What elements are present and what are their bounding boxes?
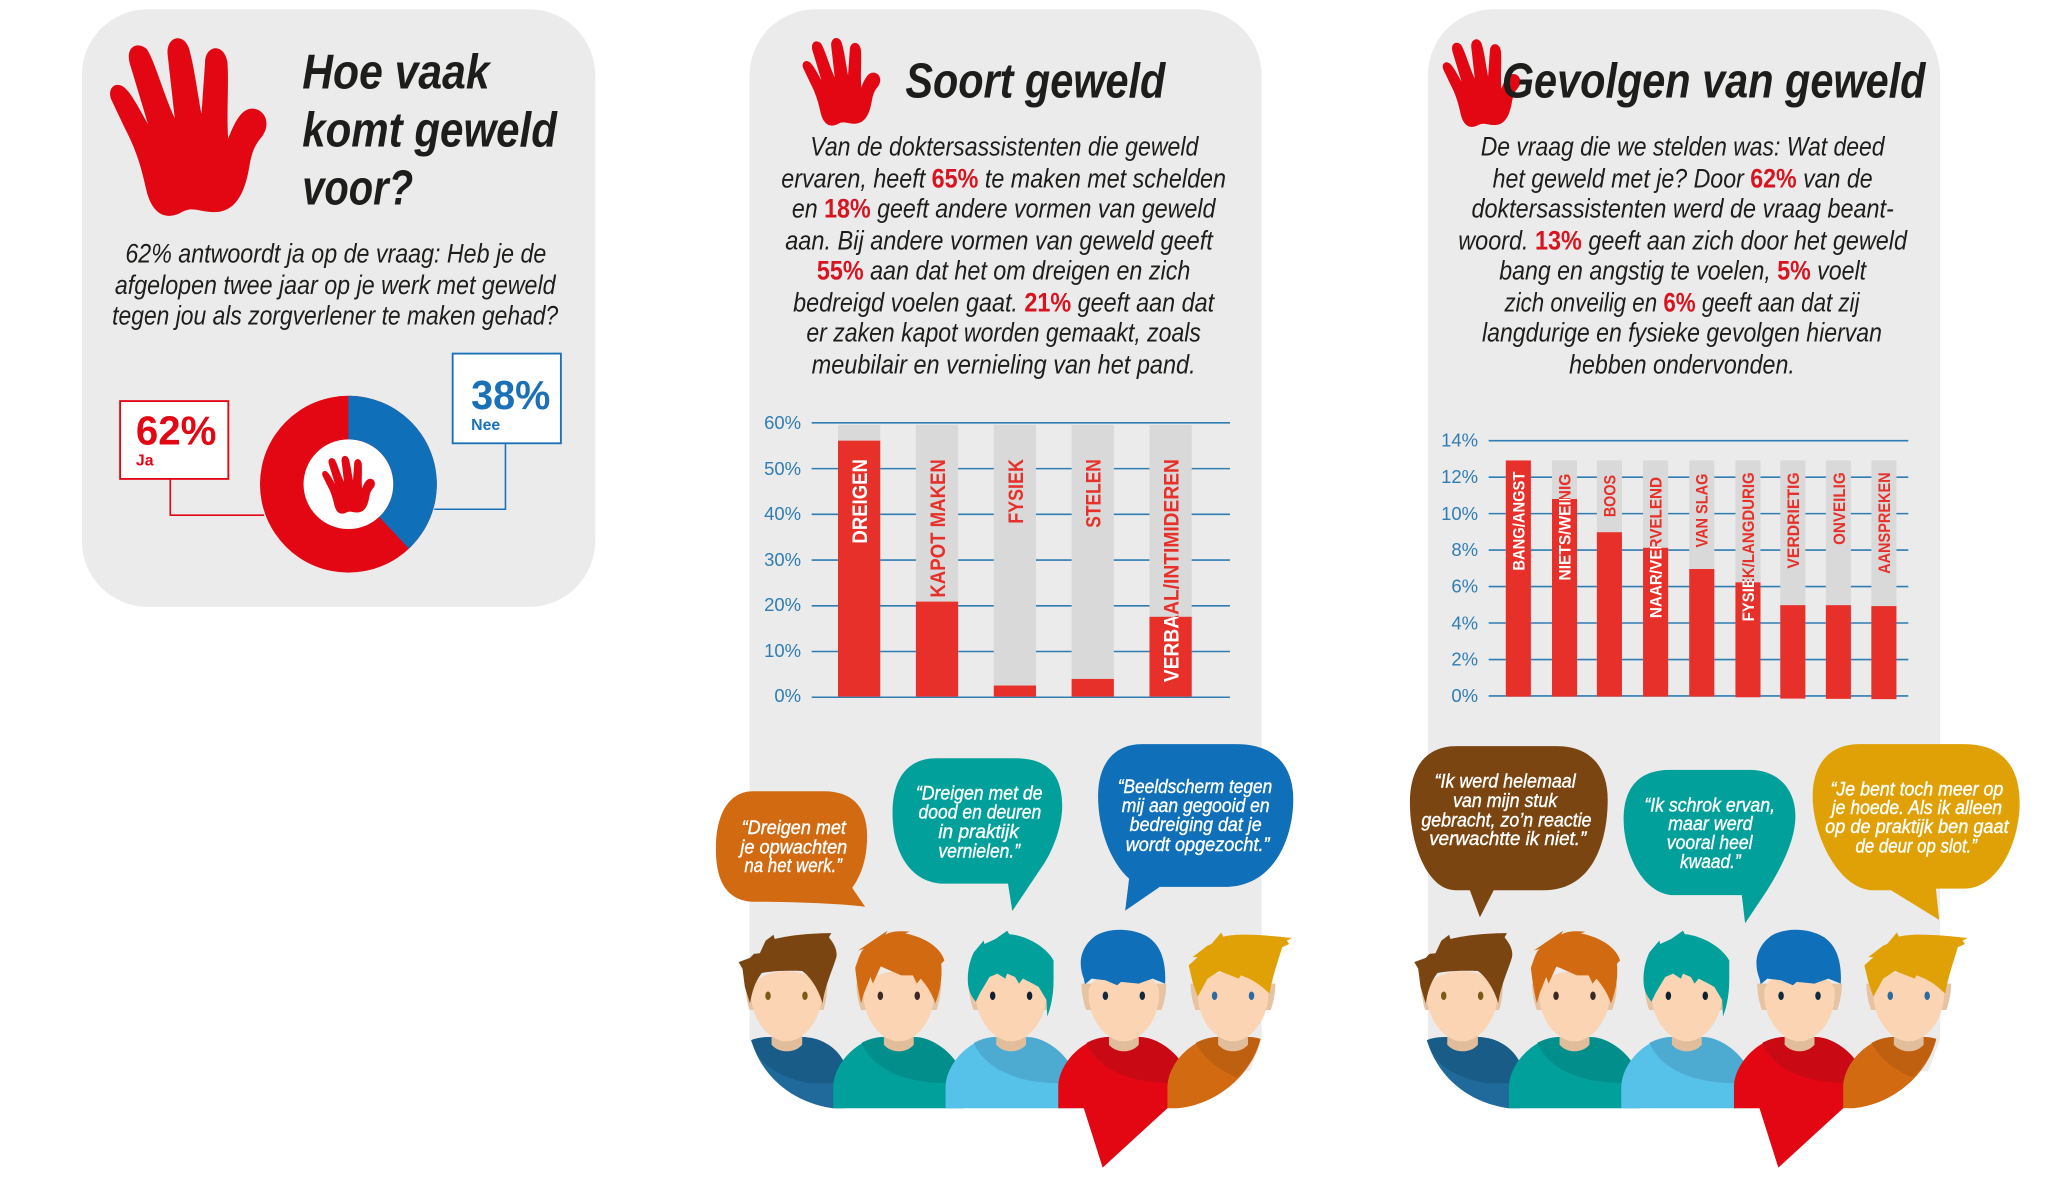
body text: zich onveilig en 6% geeft aan dat zij <box>1504 287 1860 317</box>
bar chart: soort geweld <box>764 412 1230 706</box>
axis labels: 10% <box>764 640 801 661</box>
speech bubble: blue: mij aan gegooid en <box>1122 795 1270 817</box>
body text <box>1458 132 1908 379</box>
speech bubble: teal: “Dreigen met de <box>916 783 1043 805</box>
bar labels: NAAR/VERVELEND <box>1648 477 1666 618</box>
speech bubble: blue <box>1098 744 1293 911</box>
bar labels: ONVEILIG <box>1831 472 1849 545</box>
body text: 55% aan dat het om dreigen en zich <box>817 256 1190 286</box>
person: blue hair <box>1058 930 1189 1168</box>
axis labels: 2% <box>1451 649 1478 670</box>
axis labels: 6% <box>1451 575 1478 596</box>
speech bubble: brown <box>1410 746 1608 917</box>
body text: woord. 13% geeft aan zich door het geweld <box>1458 225 1908 255</box>
axis labels: 60% <box>764 412 801 433</box>
speech bubble: teal: vooral heel <box>1667 832 1753 854</box>
person: teal hair <box>946 931 1077 1108</box>
speech bubble: teal: kwaad.” <box>1680 851 1742 873</box>
speech bubble: teal: vernielen.” <box>938 841 1021 863</box>
title: Gevolgen van geweld <box>1502 55 1926 109</box>
panel background <box>750 9 1262 1071</box>
body text: ervaren, heeft 65% te maken met schelden <box>781 163 1226 193</box>
speech bubble: brown: gebracht, zo’n reactie <box>1421 810 1592 832</box>
speech bubble: yellow: je hoede. Als ik alleen <box>1829 797 2002 819</box>
person: teal hair <box>1621 931 1752 1108</box>
title <box>302 45 558 215</box>
bar labels: BANG/ANGST <box>1510 472 1528 571</box>
people group <box>739 930 1292 1168</box>
axis labels: 20% <box>764 594 801 615</box>
grey bar tracks <box>1506 460 1896 697</box>
connector: nee <box>434 443 505 509</box>
axis labels: 4% <box>1451 612 1478 633</box>
axis labels: 12% <box>1441 466 1478 487</box>
title: Hoe vaak <box>302 45 492 99</box>
red bars <box>838 441 1192 697</box>
callout: 38% nee: Nee <box>471 417 500 434</box>
grey bar tracks <box>838 425 1192 697</box>
person: yellow hair <box>1167 932 1292 1108</box>
donut chart <box>260 396 437 573</box>
intro text: afgelopen twee jaar op je werk met geweld <box>115 270 556 300</box>
speech bubble: blue: wordt opgezocht.” <box>1126 834 1271 856</box>
callout: 62% ja: 62% <box>136 408 216 454</box>
axis labels: 10% <box>1441 503 1478 524</box>
connector: ja <box>170 479 264 515</box>
body text: er zaken kapot worden gemaakt, zoals <box>806 318 1201 348</box>
speech bubble: blue: bedreiging dat je <box>1130 814 1262 836</box>
speech bubble: teal: dood en deuren <box>919 802 1041 824</box>
title: Soort geweld <box>905 55 1166 109</box>
speech bubble: yellow <box>1813 744 2020 920</box>
bar labels: VAN SLAG <box>1694 474 1712 548</box>
bar chart: gevolgen <box>1441 430 1908 706</box>
speech bubble: brown: van mijn stuk <box>1453 790 1558 812</box>
axis labels: 8% <box>1451 539 1478 560</box>
bar labels: KAPOT MAKEN <box>927 459 950 598</box>
person: yellow hair <box>1843 932 1968 1108</box>
bar labels: FYSIEK/LANGDURIG <box>1740 472 1758 621</box>
body text: het geweld met je? Door 62% van de <box>1493 163 1873 193</box>
intro text <box>112 239 558 331</box>
person: brown hair <box>1414 933 1520 1108</box>
bar labels: FYSIEK <box>1005 458 1028 524</box>
speech bubble: yellow: op de praktijk ben gaat <box>1825 816 2010 838</box>
axis labels: 40% <box>764 503 801 524</box>
axis labels <box>1441 430 1478 706</box>
person: orange hair <box>1509 931 1640 1108</box>
body text: hebben ondervonden. <box>1569 349 1795 379</box>
body text: en 18% geeft andere vormen van geweld <box>792 194 1216 224</box>
speech bubble: teal <box>1624 770 1795 923</box>
bar labels <box>849 458 1184 682</box>
people group <box>1414 930 1968 1168</box>
bar labels: NIETS/WEINIG <box>1556 474 1574 581</box>
axis labels: 0% <box>774 685 801 706</box>
axis labels: 0% <box>1451 685 1478 706</box>
speech bubble: yellow: de deur op slot.” <box>1856 835 1978 857</box>
speech bubble: brown: verwachtte ik niet.” <box>1429 828 1588 850</box>
bar labels: STELEN <box>1083 459 1106 528</box>
person: brown hair <box>739 933 844 1108</box>
speech bubble: blue: “Beeldscherm tegen <box>1118 776 1272 798</box>
icon: hand in donut <box>322 456 375 514</box>
callout: 62% ja: Ja <box>136 453 154 470</box>
speech bubble: orange <box>716 791 867 907</box>
panel: gevolgen van geweld <box>1410 9 2020 1168</box>
person: blue hair <box>1734 930 1865 1168</box>
bar labels: BOOS <box>1601 475 1619 517</box>
icon: red hand <box>803 38 880 126</box>
title: voor? <box>302 162 413 215</box>
title: komt geweld <box>302 103 558 157</box>
bar labels: DREIGEN <box>849 459 872 544</box>
speech bubble: teal <box>893 758 1062 911</box>
panel background <box>1428 9 1940 1071</box>
speech bubble: teal: “Ik schrok ervan, <box>1644 794 1775 816</box>
body text: aan. Bij andere vormen van geweld geeft <box>785 225 1214 255</box>
body text: De vraag die we stelden was: Wat deed <box>1481 132 1885 162</box>
body text: bang en angstig te voelen, 5% voelt <box>1499 256 1867 286</box>
intro text: 62% antwoordt ja op de vraag: Heb je de <box>125 239 546 269</box>
speech bubble: brown: “Ik werd helemaal <box>1435 771 1576 793</box>
axis labels: 30% <box>764 549 801 570</box>
body text: doktersassistenten werd de vraag beant- <box>1471 194 1894 224</box>
body text: Van de doktersassistenten die geweld <box>810 132 1199 162</box>
icon: red hand <box>110 38 266 216</box>
axis labels: 14% <box>1441 430 1478 451</box>
panel: soort geweld <box>716 9 1293 1168</box>
panel background <box>82 9 595 607</box>
speech bubble: teal: in praktijk <box>938 821 1020 843</box>
panel: hoe vaak komt geweld voor <box>82 9 595 607</box>
bar labels: VERBAAL/INTIMIDEREN <box>1161 459 1184 682</box>
axis labels: 50% <box>764 458 801 479</box>
red bars <box>1506 460 1896 699</box>
axis labels <box>764 412 801 706</box>
body text <box>781 132 1226 379</box>
speech bubble: orange: je opwachten <box>738 837 847 859</box>
person: orange hair <box>833 931 964 1108</box>
callout: 38% nee <box>453 354 561 443</box>
speech bubble: orange: “Dreigen met <box>742 817 847 839</box>
bar labels <box>1510 472 1894 621</box>
speech bubble: teal: maar werd <box>1668 813 1753 835</box>
callout: 38% nee: 38% <box>471 372 550 418</box>
callout: 62% ja <box>120 401 228 479</box>
body text: bedreigd voelen gaat. 21% geeft aan dat <box>793 287 1215 317</box>
speech bubble: orange: na het werk.” <box>744 855 843 877</box>
bar labels: AANSPREKEN <box>1876 472 1894 574</box>
body text: langdurige en fysieke gevolgen hiervan <box>1482 318 1882 348</box>
speech bubble: yellow: “Je bent toch meer op <box>1830 779 2003 801</box>
intro text: tegen jou als zorgverlener te maken gehad? <box>112 301 558 331</box>
body text: meubilair en vernieling van het pand. <box>812 349 1196 379</box>
bar labels: VERDRIETIG <box>1785 472 1803 569</box>
icon: red hand <box>1443 39 1520 127</box>
